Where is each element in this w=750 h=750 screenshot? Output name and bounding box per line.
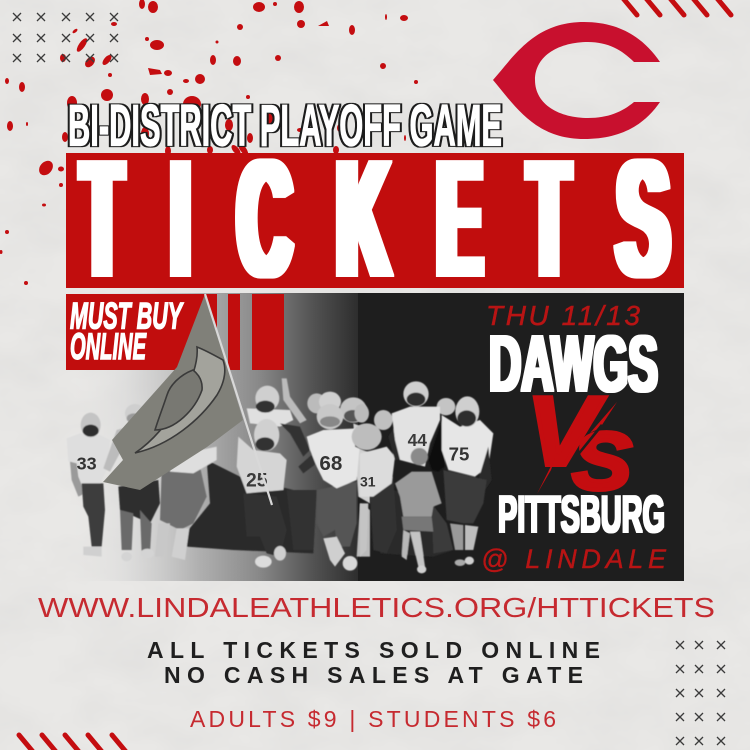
football team photo: left half: 25: [246, 471, 268, 492]
diagonal stripes top right: [622, 0, 731, 15]
ticket url: WWW.LINDALEATHLETICS.ORG/HTTICKETS: [38, 592, 715, 623]
tickets banner: T: [529, 126, 569, 312]
match date: THU 11/13: [486, 300, 640, 331]
diagonal stripes bottom left: [19, 735, 127, 750]
football team photo: left half: 33: [77, 453, 97, 473]
versus mark: S: [572, 416, 632, 507]
must buy online label: [66, 294, 284, 370]
venue: @ LINDALE: [481, 544, 667, 574]
online only notice: NO CASH SALES AT GATE: [164, 662, 583, 688]
football team photo: right half: 75: [449, 444, 469, 465]
versus mark: [526, 376, 632, 507]
tickets banner: K: [337, 126, 389, 312]
flag: [103, 294, 272, 505]
tickets banner: T: [82, 126, 122, 312]
tickets banner: C: [238, 126, 291, 312]
football team photo: right half: [352, 381, 493, 573]
online only notice: ALL TICKETS SOLD ONLINE: [147, 637, 600, 663]
tickets banner: [66, 126, 684, 312]
team C logo: [493, 22, 660, 139]
football team photo: left half: 68: [319, 452, 342, 475]
tickets banner: S: [617, 126, 669, 312]
photo panel background: [66, 293, 684, 581]
x-mark grid bottom right: [676, 641, 725, 745]
football team photo: right half: 44: [408, 430, 427, 450]
red paint splatter: [0, 0, 418, 285]
football team photo: left half: [67, 378, 370, 571]
must buy online label: ONLINE: [70, 326, 147, 367]
x-mark grid top left: [13, 13, 118, 62]
tickets banner: E: [438, 126, 482, 312]
online only notice: [147, 637, 600, 688]
must buy online label: MUST BUY: [70, 296, 184, 336]
versus mark: V: [526, 376, 606, 486]
tickets banner: I: [172, 126, 190, 312]
football team photo: right half: 31: [360, 474, 376, 490]
ticket prices: ADULTS $9 | STUDENTS $6: [190, 706, 556, 732]
